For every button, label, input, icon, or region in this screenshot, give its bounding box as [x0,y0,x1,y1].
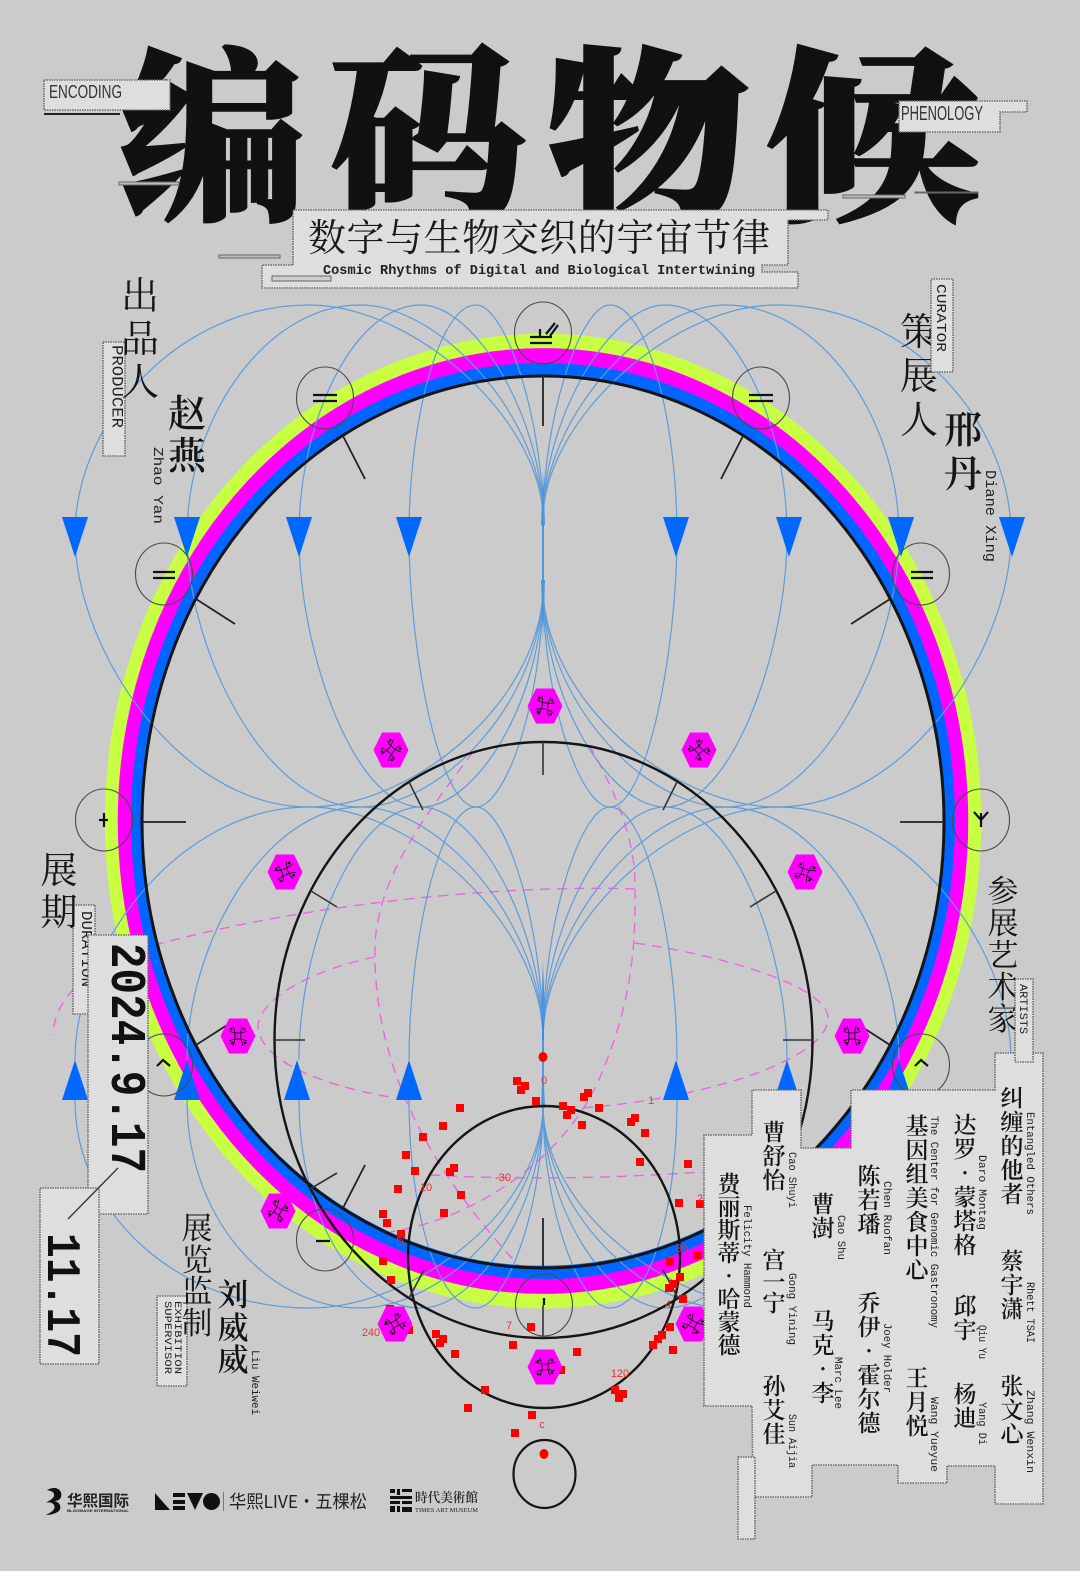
curator block: 邢丹 [944,399,982,498]
subtitle panel: Cosmic Rhythms of Digital and Biological Intertwining [323,263,755,279]
magenta hexagons with glyphs [220,688,870,1384]
artists panel: 纠缠的他者 [1000,1080,1024,1209]
blue field lines [75,305,1011,1308]
artists panel: Cao Shu [834,1215,846,1260]
artists panel: 费丽斯蒂·哈蒙德 [718,1166,742,1360]
decorative strips near the title [119,182,978,258]
red axis labels: c [539,1419,545,1431]
producer block: Zhao Yan [149,447,165,524]
rainbow ring [112,341,974,1301]
artists panel: 曹舒怡 [762,1114,788,1195]
artists panel: Entangled Others [1023,1112,1035,1215]
artists panel: Rhett TSAI [1023,1282,1035,1343]
artists panel: 基因组美食中心 [906,1108,930,1285]
exhibition supervisor block [157,1203,260,1415]
artists panel: 邱宇 [954,1288,976,1345]
duration heading: 展期 [40,840,78,936]
date connector [68,1168,118,1219]
red axis labels: 7 [506,1320,512,1332]
label: ENCODING: ENCODING [49,82,122,102]
artists panel: Chen Ruofan [880,1181,892,1255]
red axis labels: 10 [420,1182,432,1194]
red axis labels: 2 [697,1193,703,1205]
exhibition supervisor block: EXHIBITION [171,1301,183,1374]
label: ENCODING [44,80,170,115]
dashed globe lines [53,745,828,1267]
curator block: 策展人 [900,301,938,444]
curator block [900,279,998,562]
logo: NEVO 华熙LIVE·五棵松: 华熙LIVE·五棵松 [229,1488,367,1514]
red dots [538,1052,548,1459]
artists panel: 乔伊·霍尔德 [858,1285,882,1438]
exhibition supervisor block: 展览监制 [182,1203,212,1343]
title: 编码物候: 码 [330,0,525,254]
date: end [33,1188,99,1364]
artists panel: Qiu Yu [975,1325,987,1359]
artists panel: Daro Montag [975,1155,987,1230]
red axis labels: 30 [676,1243,688,1255]
exhibition supervisor block: SUPERVISOR [161,1301,173,1375]
label: PHENOLOGY: PHENOLOGY [901,103,983,125]
curator block: CURATOR [932,284,948,353]
duration heading: DURATION [77,911,94,987]
artists panel: The Center for Genomic Gastronomy [927,1116,939,1329]
title: 编码物候 [118,0,980,259]
red axis labels: 240 [362,1327,380,1339]
artists panel: 陈若璠 [858,1158,882,1239]
artists panel: 达罗·蒙塔格 [954,1107,978,1260]
artists panel: 宫一宁 [762,1242,786,1318]
artists panel: 马克·李 [812,1303,834,1408]
artists panel: 杨迪 [954,1376,976,1433]
producer block: 出品人 [121,265,159,406]
artists panel [704,979,1043,1539]
logo: Bloomage International [46,1488,130,1515]
artists panel: Yang Di [975,1402,987,1445]
artists panel: Cao Shuyi [785,1152,797,1208]
producer block: PRODUCER [108,345,126,428]
red axis labels: 120 [611,1368,629,1380]
exhibition supervisor block: 刘威威 [218,1270,248,1380]
blue triangles [62,517,1025,1100]
label: PHENOLOGY [899,101,1027,132]
red axis labels: D [396,1237,404,1249]
artists panel: Marc Lee [831,1357,843,1409]
curator block: Diane Xing [981,470,998,562]
red axis labels: 0 [541,1075,547,1087]
date: start: 2024.9.17 [96,943,153,1173]
logo: Times Art Museum: 時代美術館 [415,1487,478,1506]
artists panel: Joey Holder [880,1323,892,1393]
artists panel: 蔡宇潇 [1000,1243,1024,1324]
artists panel: 张文心 [1000,1368,1026,1449]
red axis labels [362,1075,703,1431]
logo: NEVO 华熙LIVE·五棵松 [155,1488,367,1514]
artists panel: Sun Aijia [785,1414,797,1469]
red axis labels: -30 [495,1172,511,1184]
exhibition supervisor block: Liu Weiwei [248,1350,260,1415]
artists panel: ARTISTS [1016,984,1028,1034]
producer block: 赵燕 [168,383,208,480]
artists panel: Zhang Wenxin [1023,1390,1035,1473]
red axis labels: 4 [665,1299,671,1311]
thin circles with glyphs on the ring [76,302,1010,1336]
title: 编码物候: 编 [118,0,304,259]
artists heading: 参展艺术家 [988,866,1018,1039]
logo: Times Art Museum: TIMES ART MUSEUM [415,1507,478,1514]
artists panel: Felicity Hammond [740,1205,752,1308]
artists panel: 曹澍 [812,1186,834,1243]
logo: Times Art Museum [390,1487,478,1514]
subtitle panel [262,207,828,288]
artists panel: 孙艾佳 [762,1368,786,1449]
black ellipses and ticks [142,376,944,1508]
duration heading [40,840,95,1014]
artists panel: 王月悦 [906,1360,928,1441]
artists panel: Wang Yueyue [927,1397,939,1472]
red axis labels: 1 [648,1095,654,1107]
date: end: 11.17 [33,1233,87,1357]
logo: Bloomage International: 华熙国际 [67,1489,129,1511]
artists panel: Gong Yining [785,1273,797,1345]
producer block [103,265,208,524]
subtitle panel: 数字与生物交织的宇宙节律 [308,207,770,262]
red data squares [379,1077,704,1437]
logo: Bloomage International: BLOOMAGE INTERNATIONAL [67,1508,130,1513]
